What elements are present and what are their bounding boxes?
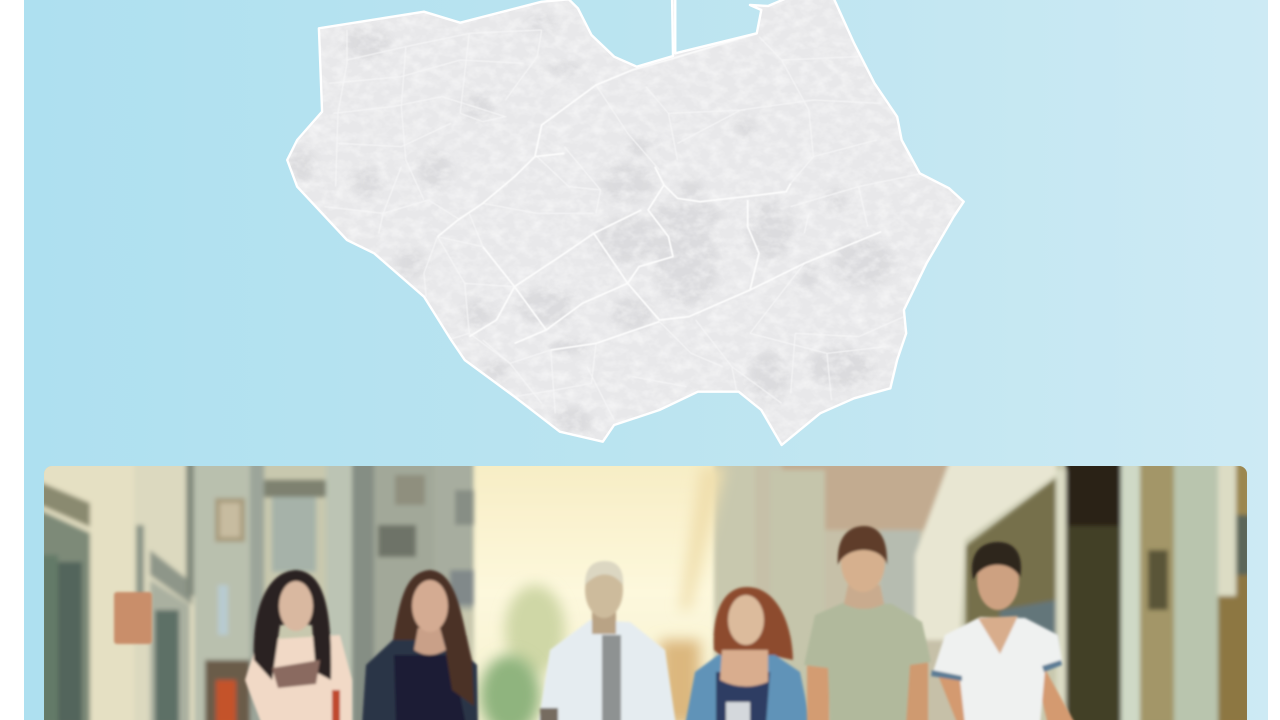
photo: residents walking down a street [40, 460, 1251, 720]
person 2: woman in dark cardigan with long hair [362, 570, 478, 720]
map land fill [287, 0, 964, 445]
person 5: man in sage t-shirt [804, 526, 931, 720]
icon: copper wall lamp [114, 592, 152, 644]
person 6: young man in white t-shirt [931, 542, 1076, 720]
map major roads [438, 33, 881, 350]
map darker city blocks [288, 16, 893, 436]
map minor streets [324, 30, 922, 420]
map: city district outline [270, 0, 976, 448]
photo: right storefronts [755, 460, 1251, 720]
map white coastline [287, 0, 964, 445]
person 1: woman in floral blouse [245, 570, 352, 720]
map mottled street texture [270, 0, 976, 448]
photo: bright centre of the street [474, 460, 725, 720]
person 4: woman in denim jacket [685, 587, 811, 720]
photo: left storefronts [40, 460, 481, 720]
person 3: older man in open white shirt [538, 561, 676, 720]
